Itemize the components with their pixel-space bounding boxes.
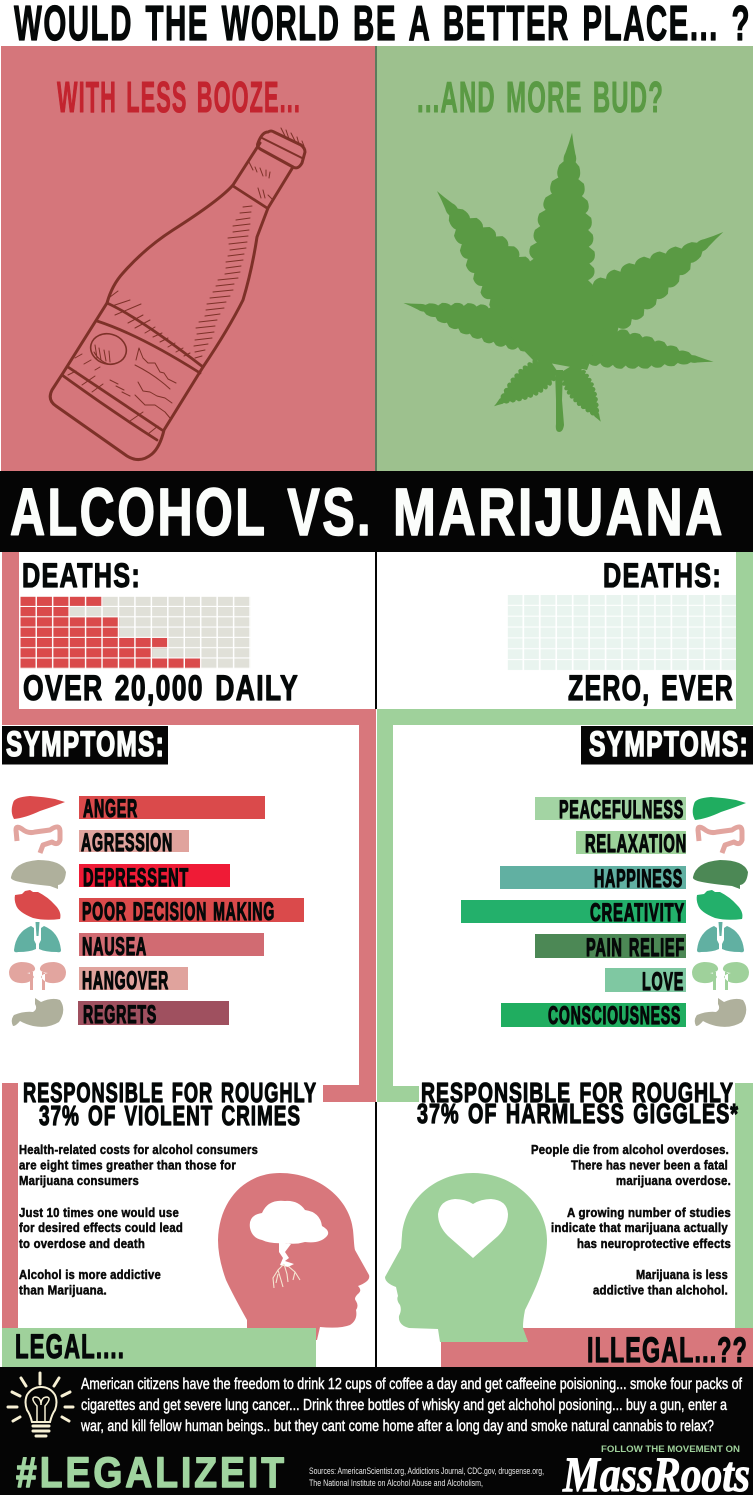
- panel: alcohol hero: [1, 46, 376, 471]
- panel: alcohol hero: WITH LESS BOOZE...: [57, 73, 301, 122]
- text: marijuana facts: People die from alcohol overdoses.: [531, 1143, 729, 1157]
- panel: alcohol deaths: [20, 557, 299, 708]
- heading: violent crimes: [23, 1077, 317, 1131]
- icon: kidneys: [692, 962, 749, 990]
- text: alcohol facts: Health-related costs for alcohol consumers: [19, 1143, 258, 1157]
- sources: [309, 1466, 544, 1488]
- sources: Sources: AmericanScientist.org, Addictions Journal, CDC.gov, drugsense.org,: [309, 1466, 544, 1476]
- bar: depressent: DEPRESSENT: [83, 864, 189, 892]
- frame: pink connector lines: [2, 552, 376, 1102]
- heading: deaths: DEATHS:: [22, 557, 141, 595]
- icon: stomach: [12, 998, 63, 1027]
- bar: pain relief: PAIN RELIEF: [586, 934, 685, 962]
- text: marijuana facts: addictive than alchohol.: [593, 1284, 728, 1298]
- icon: heart: [697, 890, 742, 920]
- header band: alcohol vs marijuana: [0, 471, 753, 552]
- icon: colon: [698, 827, 742, 853]
- text: marijuana facts: [531, 1143, 731, 1298]
- icon: stomach: [695, 998, 746, 1027]
- panel: alcohol symptoms: [2, 725, 304, 1029]
- panel: marijuana symptoms: [461, 725, 753, 1030]
- icon: liver: [693, 797, 746, 820]
- waffle chart: alcohol deaths: [20, 597, 251, 669]
- heading: violent crimes: RESPONSIBLE FOR ROUGHLY: [23, 1077, 317, 1108]
- text: marijuana facts: A growing number of studies: [567, 1206, 731, 1220]
- bar: agression: AGRESSION: [81, 829, 173, 857]
- bar: relaxation: RELAXATION: [585, 830, 687, 858]
- bar: hangover: [79, 967, 188, 995]
- banner: legal: LEGAL....: [15, 1328, 125, 1366]
- heading: harmless giggles: [417, 1077, 739, 1129]
- text: alcohol facts: than Marijuana.: [19, 1284, 107, 1298]
- follow the movement: FOLLOW THE MOVEMENT ON: [601, 1444, 740, 1455]
- bar: anger: ANGER: [83, 795, 138, 823]
- text: alcohol facts: are eight times greather than those for: [19, 1158, 236, 1172]
- text: alcohol facts: to overdose and death: [19, 1237, 145, 1251]
- banner: illegal: [441, 1328, 753, 1370]
- text: closing argument: [80, 1376, 742, 1435]
- icon: kidneys: [9, 962, 66, 990]
- bar: agression: [79, 829, 189, 857]
- text: alcohol facts: [19, 1143, 258, 1298]
- icon: colon: [16, 827, 60, 853]
- bar: nausea: NAUSEA: [82, 933, 147, 961]
- bar: happiness: [500, 865, 686, 893]
- bar: poor decision making: [79, 898, 304, 926]
- bar: consciousness: [501, 1002, 686, 1030]
- divider between hero panels: [375, 46, 377, 471]
- icon: liver: [12, 796, 65, 819]
- bar: creativity: [461, 899, 686, 927]
- panel: marijuana hero: [376, 46, 753, 471]
- bar: relaxation: [576, 830, 687, 858]
- icon: heart: [15, 890, 60, 920]
- bar: pain relief: [535, 934, 686, 962]
- heading: symptoms: [2, 725, 168, 764]
- text: alcohol facts: Alcohol is more addictive: [19, 1268, 161, 1282]
- heading: symptoms: SYMPTOMS:: [6, 725, 165, 764]
- text: alcohol facts: Marijuana consumers: [19, 1174, 139, 1188]
- icon: head with storm cloud: [218, 1173, 369, 1340]
- bar: love: LOVE: [642, 968, 684, 996]
- bar: anger: [79, 795, 265, 823]
- heading: violent crimes: 37% OF VIOLENT CRIMES: [39, 1100, 301, 1131]
- bar: love: [605, 968, 686, 996]
- footer: [0, 1367, 753, 1495]
- bar: peacefulness: [535, 796, 686, 824]
- bar: regrets: REGRETS: [83, 1001, 157, 1029]
- panel: alcohol effects: [2, 1077, 369, 1340]
- icon: brain: [693, 860, 748, 889]
- icon: brain: [11, 860, 66, 889]
- sources: The National Institute on Alcohol Abuse and Alcoholism,: [309, 1478, 483, 1488]
- text: alcohol facts: for desired effects could lead: [19, 1221, 183, 1235]
- icon: lungs: [697, 922, 744, 952]
- banner: legal: [2, 1328, 316, 1367]
- stat: over 20,000 daily: OVER 20,000 DAILY: [23, 669, 299, 708]
- text: marijuana facts: indicate that marijuana actually: [551, 1221, 728, 1235]
- heading: alcohol vs: ALCOHOL VS.: [10, 475, 373, 550]
- icon: light bulb: [8, 1373, 73, 1436]
- bar: poor decision making: POOR DECISION MAKING: [82, 898, 275, 926]
- frame: green connector lines: [377, 552, 753, 1102]
- icon: lungs: [14, 922, 61, 952]
- icon: cannabis leaf: [399, 130, 739, 432]
- bar: happiness: HAPPINESS: [594, 865, 683, 893]
- text: marijuana facts: marijuana overdose.: [616, 1174, 731, 1188]
- panel: marijuana deaths: [508, 557, 736, 708]
- bar: nausea: [79, 933, 264, 961]
- text: marijuana facts: Marijuana is less: [636, 1268, 728, 1282]
- icon: bottle: [50, 128, 305, 460]
- waffle chart: marijuana deaths: [508, 595, 736, 671]
- bar: creativity: CREATIVITY: [590, 899, 685, 927]
- bar: hangover: HANGOVER: [82, 967, 169, 995]
- text: marijuana facts: There has never been a fatal: [571, 1158, 728, 1172]
- text: marijuana facts: has neuroprotective effects: [577, 1237, 731, 1251]
- icon: head with heart: [385, 1173, 547, 1342]
- panel: marijuana effects: [385, 1077, 753, 1342]
- text: alcohol facts: Just 10 times one would use: [19, 1206, 179, 1220]
